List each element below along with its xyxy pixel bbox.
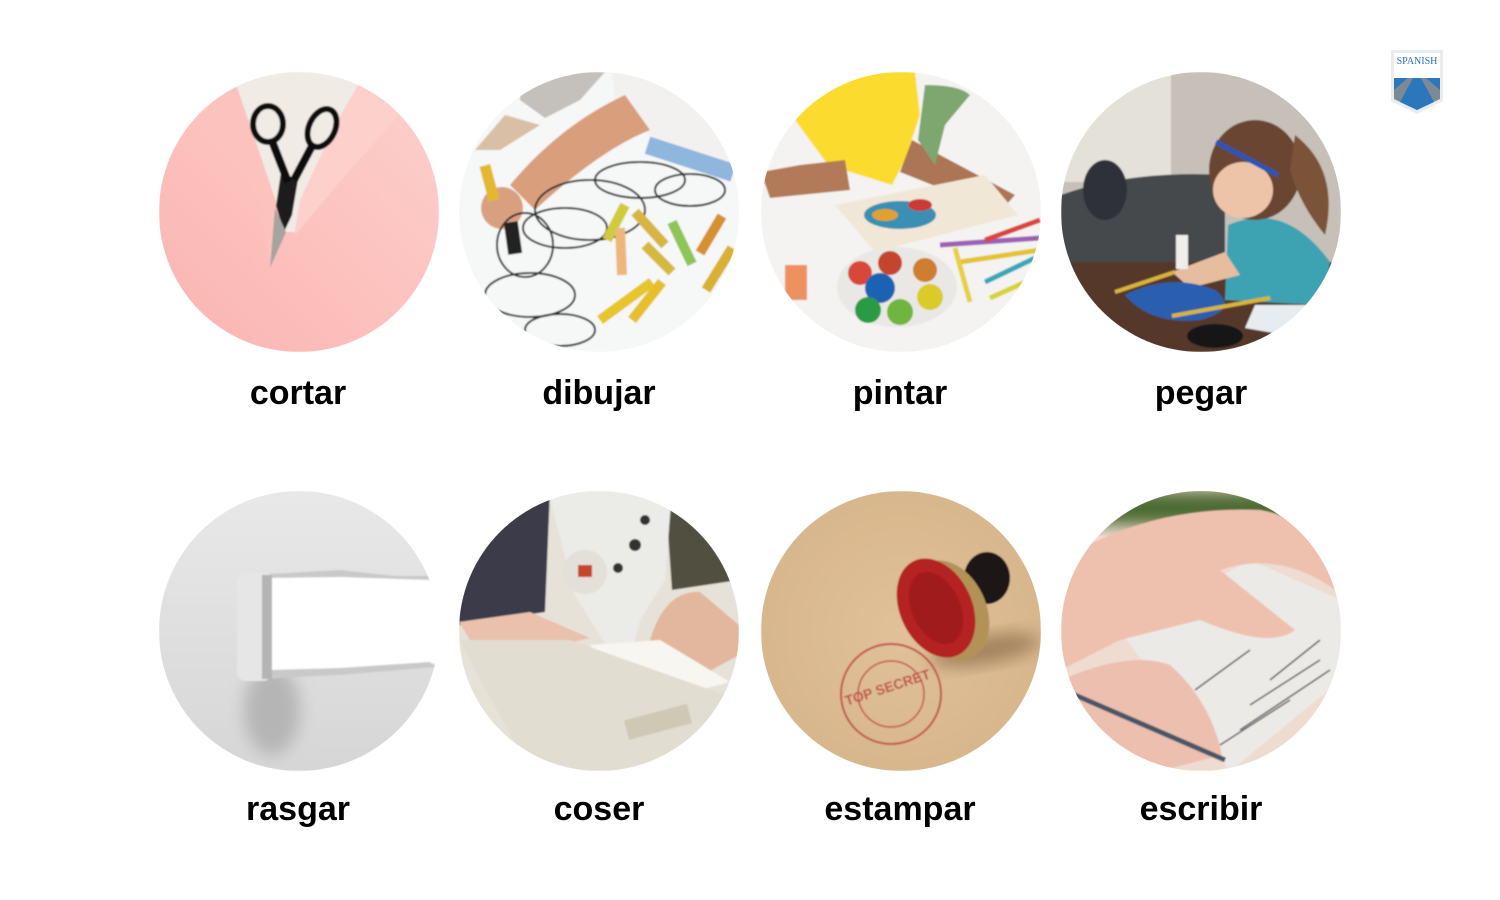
icon: stamp on kraft paper [761,491,1042,771]
label: dibujar: dibujar [542,374,656,412]
logo: Spanish Academy shield [1391,50,1443,114]
label: pintar: pintar [853,374,947,412]
logo: Spanish Academy shield: SPANISH [1397,56,1437,67]
label: coser: coser [554,790,644,828]
icon: girl gluing paper [1061,72,1341,352]
label: estampar: estampar [824,790,976,828]
label: escribir: escribir [1140,790,1262,828]
icon: child painting with palette [761,72,1041,352]
icon: child drawing with crayons [459,72,739,352]
icon: sewing machine [459,491,739,771]
icon: hand writing in notebook [1061,491,1341,771]
stamp mark text: TOP SECRET [843,666,933,709]
icon: scissors cutting pink paper [159,72,439,352]
label: pegar: pegar [1155,374,1247,412]
label: rasgar: rasgar [246,790,350,828]
label: cortar: cortar [250,374,346,412]
icon: torn paper [159,491,440,771]
